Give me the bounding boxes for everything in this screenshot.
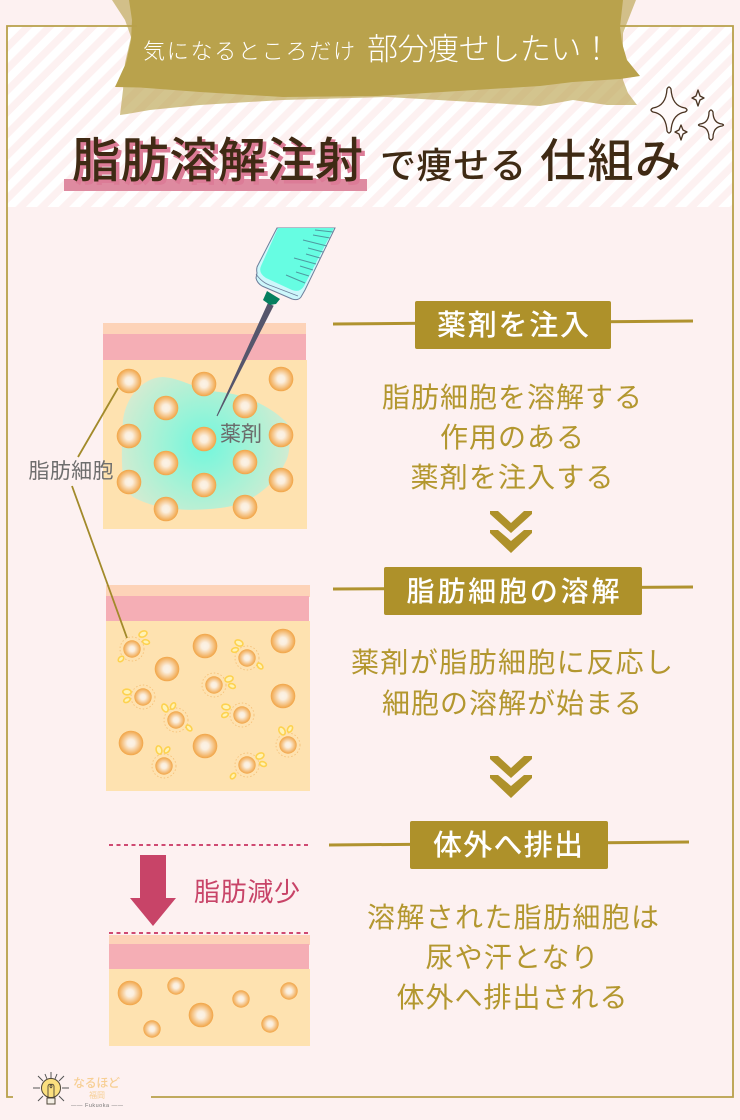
icon: light bulb <box>33 1072 69 1104</box>
step 2 heading <box>333 567 693 615</box>
step 2 text: 薬剤が脂肪細胞に反応し <box>351 647 673 678</box>
dashed guide lines <box>109 845 310 933</box>
label: fat cells <box>28 388 118 580</box>
step 1 heading <box>333 301 693 349</box>
skin diagram 3: reduced fat <box>109 935 310 1046</box>
droplets <box>117 630 294 780</box>
striped header background <box>7 26 733 207</box>
step 3 text <box>367 902 659 1013</box>
title shadow: 脂肪溶解注射 <box>75 138 366 191</box>
step 2 text: 細胞の溶解が始まる <box>382 688 642 719</box>
step 2 heading: 脂肪細胞の溶解 <box>406 576 620 607</box>
down arrow <box>130 855 176 926</box>
label: drug: 薬剤 <box>220 423 262 446</box>
step 2 text <box>351 647 673 719</box>
banner text <box>143 32 612 67</box>
title middle: で痩せる <box>380 145 526 186</box>
skin diagram 1: drug injection <box>103 323 307 529</box>
step 1 text: 作用のある <box>440 422 584 453</box>
step 1 text <box>382 382 642 493</box>
logo wordmark: なるほど <box>73 1076 120 1090</box>
logo <box>33 1072 124 1109</box>
title end: 仕組み <box>540 135 681 187</box>
logo: 福岡 <box>89 1090 105 1100</box>
label: fat cells: 脂肪細胞 <box>28 460 114 483</box>
logo: —— Fukuoka —— <box>71 1103 124 1109</box>
step 3 text: 尿や汗となり <box>426 942 598 973</box>
step 3 text: 溶解された脂肪細胞は <box>367 902 659 933</box>
step 1 text: 脂肪細胞を溶解する <box>382 382 642 413</box>
fat cells <box>117 367 293 521</box>
banner text: 部分痩せしたい！ <box>367 32 612 67</box>
reduction label: 脂肪減少 <box>194 877 300 907</box>
drug spread <box>122 377 289 510</box>
syringe <box>217 228 335 416</box>
step 3 text: 体外へ排出される <box>396 982 628 1013</box>
lower leader line over diagram 2 <box>106 580 127 638</box>
step 1 text: 薬剤を注入する <box>410 462 614 493</box>
banner text: 気になるところだけ <box>143 39 355 64</box>
sparkles <box>651 87 724 140</box>
step 3 heading: 体外へ排出 <box>433 829 583 862</box>
title highlight bar <box>64 179 367 191</box>
title main: 脂肪溶解注射 <box>72 135 363 188</box>
dashed rings <box>120 637 300 778</box>
leader lines <box>72 388 118 580</box>
skin diagram 2: dissolving <box>106 585 310 791</box>
title <box>64 135 681 191</box>
step 1 heading: 薬剤を注入 <box>437 309 589 342</box>
chevron arrow 1 <box>490 511 532 553</box>
fat reduction indicator <box>109 845 310 933</box>
top banner <box>112 0 640 115</box>
step 3 heading <box>329 821 689 869</box>
chevron arrow 2 <box>490 756 532 798</box>
